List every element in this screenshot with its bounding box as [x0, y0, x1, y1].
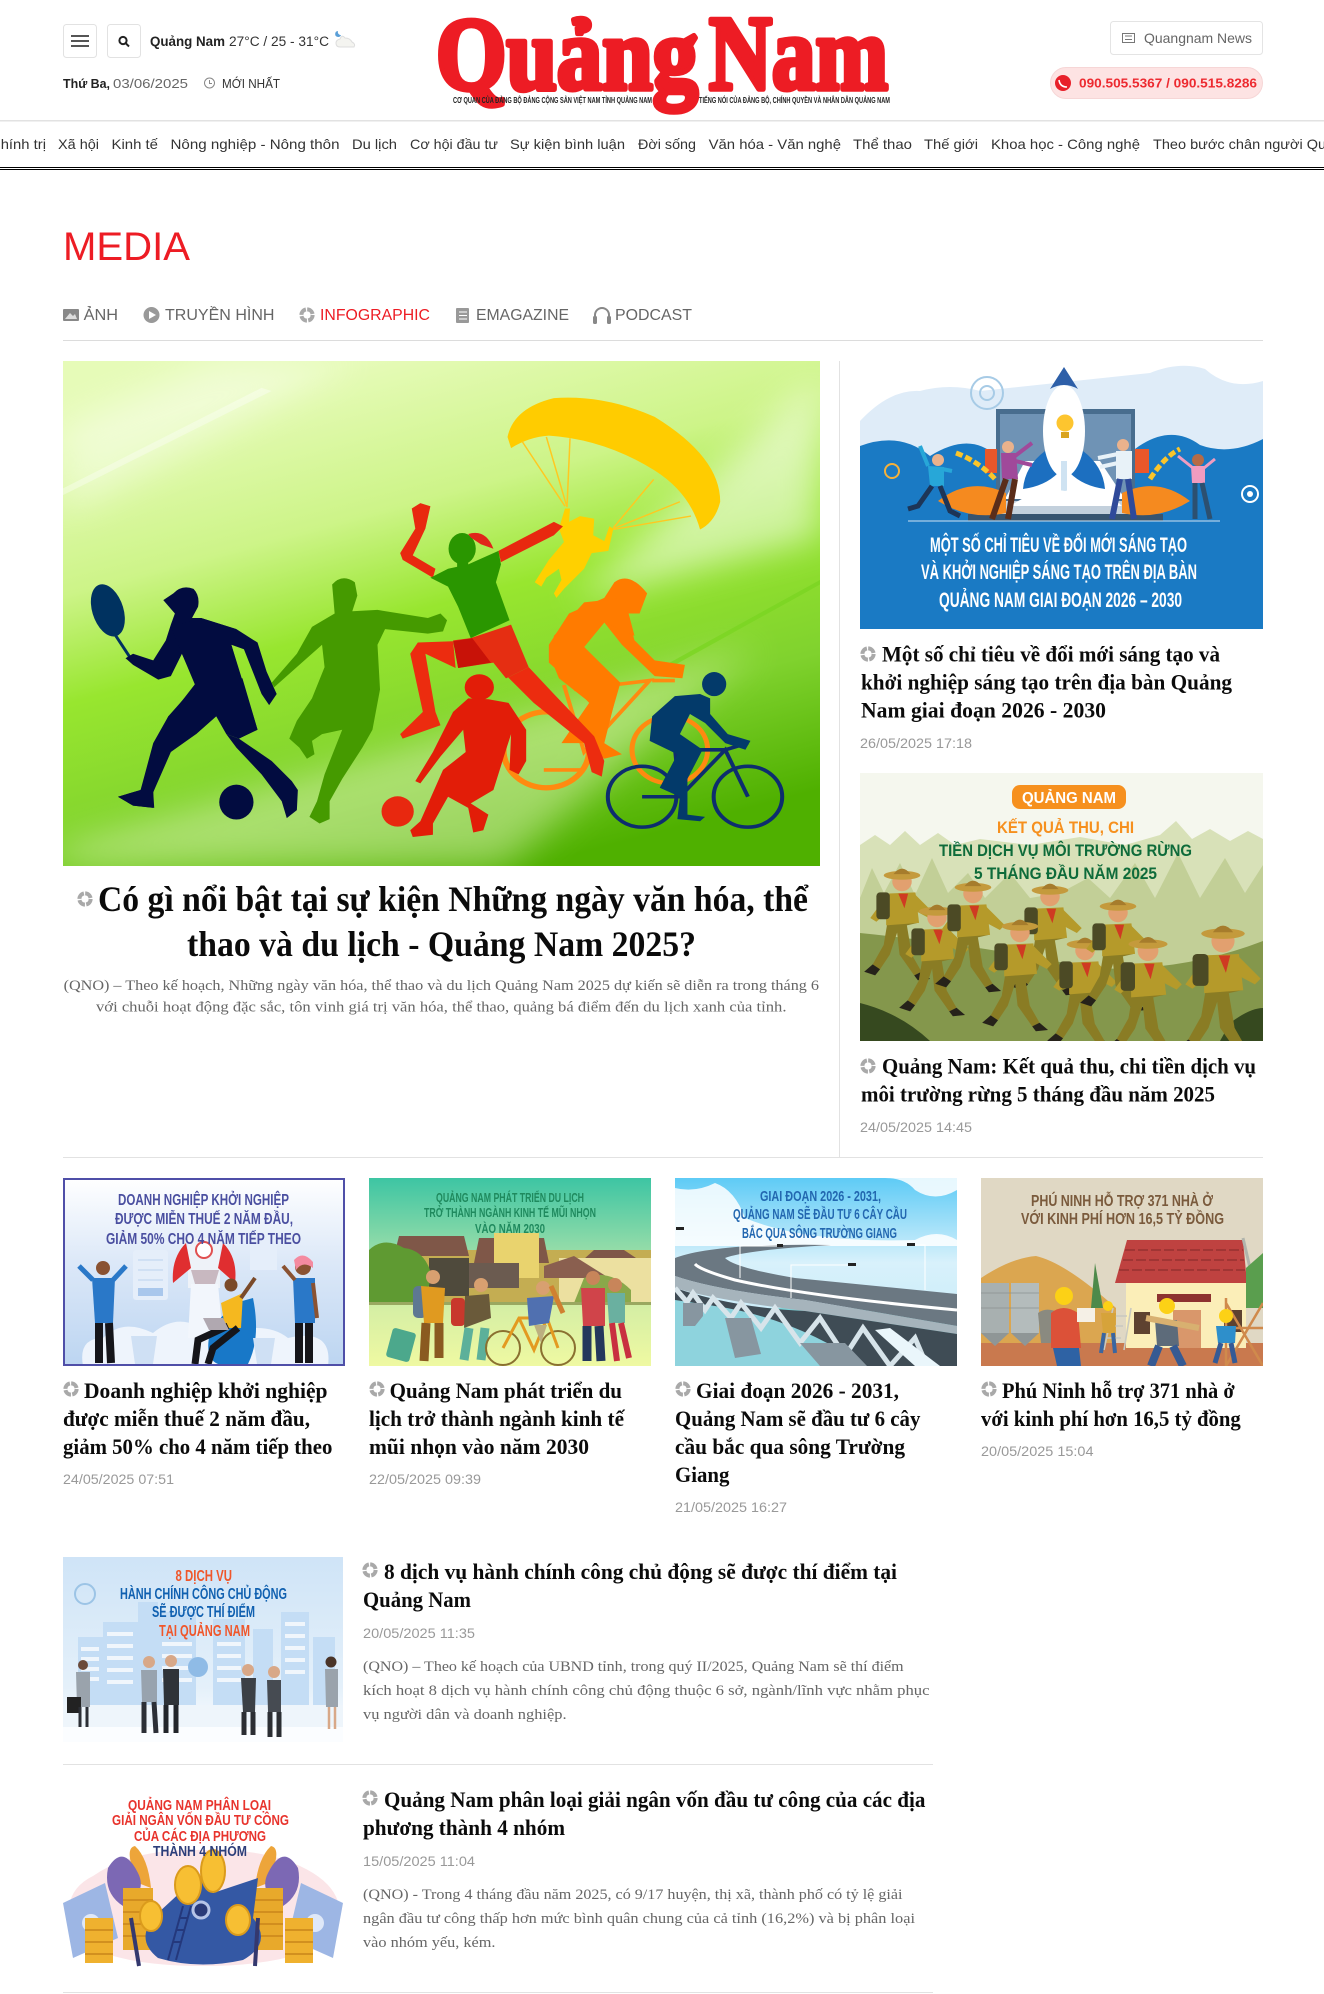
workers	[1051, 1308, 1081, 1348]
green footballer	[272, 578, 447, 824]
illustration: disbursement groups: THÀNH 4 NHÓM	[153, 1842, 247, 1860]
lead summary: (QNO) – Theo kế hoạch, Những ngày văn hóa, thể thao và du lịch Quảng Nam 2025 dự kiến sẽ diễn ra trong tháng 6	[64, 978, 820, 994]
navigation bar: Xã hội	[58, 136, 99, 152]
list date 1: 20/05/2025 11:35	[363, 1625, 475, 1641]
card 2	[369, 1178, 651, 1487]
list summary 1: kích hoạt 8 dịch vụ hành chính công chủ động thuộc 6 sở, ngành/lĩnh vực nhằm phục	[363, 1683, 930, 1699]
list summary 2: vào nhóm yếu, kém.	[363, 1935, 496, 1951]
card title 3: Giang	[675, 1462, 730, 1487]
search button	[108, 24, 140, 58]
card date 2: 22/05/2025 09:39	[369, 1471, 481, 1487]
tourists	[386, 1327, 416, 1363]
illustration: Hoi An tourism	[369, 1178, 651, 1366]
card title 2: Quảng Nam phát triển du	[390, 1378, 622, 1403]
logo: CƠ QUAN CỦA ĐẢNG BỘ ĐẢNG CỘNG SẢN VIỆT NAM TỈNH QUẢNG NAM	[453, 96, 652, 105]
lead title: Có gì nổi bật tại sự kiện Những ngày văn hóa, thể	[98, 879, 809, 919]
card 3	[675, 1178, 957, 1515]
navigation bar: Kinh tế	[112, 136, 158, 152]
people	[932, 454, 944, 466]
date and latest	[63, 76, 280, 91]
illustration: bridge: GIAI ĐOẠN 2026 - 2031,	[760, 1189, 881, 1205]
phone pill: 090.505.5367 / 090.515.8286	[1079, 76, 1257, 90]
card title 3: cầu bắc qua sông Trường	[675, 1434, 906, 1459]
illustration: forest scouts	[860, 773, 1263, 1041]
category tabs: EMAGAZINE	[476, 307, 569, 324]
illustration: Hoi An tourism: VÀO NĂM 2030	[475, 1221, 545, 1236]
card title 2: mũi nhọn vào năm 2030	[369, 1434, 589, 1459]
illustration: forest scouts: QUẢNG NAM	[1022, 788, 1116, 807]
illustration: startup tax exemption: DOANH NGHIỆP KHỞI NGHIỆP	[118, 1191, 289, 1209]
category tabs: TRUYỀN HÌNH	[165, 305, 274, 324]
menu button	[64, 24, 96, 58]
illustration: bridge	[675, 1178, 957, 1366]
illustration: public services	[63, 1557, 343, 1737]
phone pill	[1050, 68, 1262, 98]
section heading: MEDIA: MEDIA	[63, 225, 190, 269]
card title 1	[63, 1378, 332, 1459]
navigation bar: Khoa học - Công nghệ	[991, 136, 1140, 152]
list summary 1	[363, 1659, 930, 1723]
paraglider	[508, 398, 720, 529]
navigation bar: Thế giới	[924, 136, 978, 152]
illustration: public services: SẼ ĐƯỢC THÍ ĐIỂM	[152, 1603, 255, 1621]
navy cyclist	[608, 743, 782, 827]
Quangnam News button	[1110, 22, 1262, 54]
card title 4: với kinh phí hơn 16,5 tỷ đồng	[981, 1406, 1241, 1431]
list date 2: 15/05/2025 11:04	[363, 1853, 475, 1869]
logo: TIẾNG NÓI CỦA ĐẢNG BỘ, CHÍNH QUYỀN VÀ NHÂN DÂN QUẢNG NAM	[699, 95, 890, 105]
navigation bar: Đời sống	[638, 136, 696, 152]
side title 2: Quảng Nam: Kết quả thu, chi tiền dịch vụ	[882, 1054, 1256, 1078]
illustration: forest scouts: 5 THÁNG ĐẦU NĂM 2025	[974, 864, 1157, 883]
side date 2: 24/05/2025 14:45	[860, 1119, 972, 1135]
illustration: house construction: PHÚ NINH HỖ TRỢ 371 NHÀ Ở	[1031, 1191, 1213, 1210]
card title 4: Phú Ninh hỗ trợ 371 nhà ở	[1002, 1378, 1235, 1403]
card date 1: 24/05/2025 07:51	[63, 1471, 174, 1487]
jumping woman	[400, 503, 435, 578]
Quangnam News button: Quangnam News	[1144, 30, 1252, 46]
illustration: Hoi An tourism: QUẢNG NAM PHÁT TRIỂN DU LỊCH	[436, 1190, 584, 1205]
lead title	[79, 879, 809, 964]
navigation bar: Sự kiện bình luận	[510, 136, 625, 152]
lead title: thao và du lịch - Quảng Nam 2025?	[187, 924, 696, 964]
list title 2: phương thành 4 nhóm	[363, 1815, 565, 1840]
side title 1: Một số chỉ tiêu về đổi mới sáng tạo và	[882, 642, 1220, 666]
card date 3: 21/05/2025 16:27	[675, 1499, 787, 1515]
list summary 1: vụ người dân và doanh nghiệp.	[363, 1707, 567, 1723]
navigation bar: Thể thao	[853, 136, 912, 152]
list item 2	[63, 1787, 925, 1970]
tennis player	[85, 581, 131, 640]
date and latest: 03/06/2025	[113, 76, 188, 91]
orange cyclist	[503, 681, 708, 788]
illustration: forest scouts: KẾT QUẢ THU, CHI	[997, 818, 1134, 837]
weather: 27°C / 25 - 31°C	[229, 34, 329, 49]
list summary 2	[363, 1887, 915, 1951]
card title 3: Quảng Nam sẽ đầu tư 6 cây	[675, 1406, 921, 1431]
list item 1	[63, 1557, 930, 1742]
logo	[436, 0, 890, 112]
people in suits	[78, 1660, 88, 1670]
illustration: forest scouts: TIỀN DỊCH VỤ MÔI TRƯỜNG RỪNG	[939, 841, 1192, 860]
side article 1	[860, 361, 1263, 751]
card date 4: 20/05/2025 15:04	[981, 1443, 1094, 1459]
list title 1	[363, 1559, 897, 1612]
list title 1: Quảng Nam	[363, 1587, 471, 1612]
card title 4	[981, 1378, 1241, 1431]
card 4	[981, 1178, 1263, 1459]
navigation bar	[0, 120, 1324, 170]
card title 3	[675, 1378, 921, 1487]
side title 1: Nam giai đoạn 2026 - 2030	[861, 698, 1106, 722]
category tabs: ẢNH	[84, 305, 118, 324]
weather: Quảng Nam	[150, 34, 225, 49]
side title 2	[861, 1054, 1256, 1106]
card 1	[63, 1178, 345, 1487]
card title 2: lịch trở thành ngành kinh tế	[369, 1406, 626, 1431]
header	[63, 0, 1262, 112]
category tabs: INFOGRAPHIC	[320, 307, 430, 324]
deck	[675, 1245, 957, 1326]
illustration: startup tax exemption	[63, 1178, 345, 1366]
card title 1: được miễn thuế 2 năm đầu,	[63, 1406, 310, 1431]
navigation bar: Cơ hội đầu tư	[410, 136, 498, 152]
side title 1	[861, 642, 1233, 722]
card title 1: Doanh nghiệp khởi nghiệp	[84, 1378, 328, 1403]
illustration: public services: 8 DỊCH VỤ	[176, 1568, 232, 1585]
list title 2: Quảng Nam phân loại giải ngân vốn đầu tư công của các địa	[384, 1787, 925, 1812]
side date 1: 26/05/2025 17:18	[860, 735, 972, 751]
illustration: disbursement groups: QUẢNG NAM PHÂN LOẠI	[128, 1796, 271, 1814]
navigation bar: Văn hóa - Văn nghệ	[709, 136, 841, 152]
date and latest: MỚI NHẤT	[222, 76, 280, 91]
category tabs: PODCAST	[615, 307, 692, 324]
side title 2: môi trường rừng 5 tháng đầu năm 2025	[861, 1082, 1215, 1106]
illustration: startup tax exemption: ĐƯỢC MIỄN THUẾ 2 NĂM ĐẦU,	[115, 1211, 293, 1228]
card title 2	[369, 1378, 626, 1459]
illustration: disbursement groups: GIẢI NGÂN VỐN ĐẦU TƯ CÔNG	[112, 1811, 289, 1829]
list title 2	[363, 1787, 925, 1840]
navigation bar: Du lịch	[352, 136, 397, 152]
navigation bar: Nông nghiệp - Nông thôn	[170, 136, 340, 152]
lead summary	[64, 978, 820, 1016]
weather	[150, 31, 355, 49]
list summary 1: (QNO) – Theo kế hoạch của UBND tỉnh, trong quý II/2025, Quảng Nam sẽ thí điểm	[363, 1659, 904, 1675]
date and latest: Thứ Ba,	[63, 76, 110, 91]
card title 3: Giai đoạn 2026 - 2031,	[696, 1378, 899, 1403]
illustration: startup rocket	[860, 366, 1263, 629]
hero illustration: sports silhouettes	[63, 361, 820, 866]
lead summary: với chuỗi hoạt động đặc sắc, tôn vinh giá trị văn hóa, thể thao, quảng bá điểm đến du lịch xanh của tỉnh.	[96, 1000, 786, 1016]
illustration: disbursement groups: CỦA CÁC ĐỊA PHƯƠNG	[134, 1827, 266, 1845]
category tabs	[63, 305, 1263, 341]
list summary 2: (QNO) - Trong 4 tháng đầu năm 2025, có 9/17 huyện, thị xã, thành phố có tỷ lệ giải	[363, 1887, 902, 1903]
card title 1: giảm 50% cho 4 năm tiếp theo	[63, 1434, 332, 1459]
list title 1: 8 dịch vụ hành chính công chủ động sẽ được thí điểm tại	[384, 1559, 897, 1584]
illustration: disbursement groups	[63, 1796, 343, 1966]
list summary 2: ngân đầu tư công thấp hơn mức bình quân chung của cả tỉnh (16,2%) và bị phân loại	[363, 1911, 915, 1927]
logo: Quảng	[436, 0, 698, 112]
side title 1: khởi nghiệp sáng tạo trên địa bàn Quảng	[861, 670, 1233, 694]
illustration: public services: TẠI QUẢNG NAM	[159, 1623, 250, 1640]
red footballer	[465, 674, 494, 700]
lead article panel	[63, 361, 820, 1016]
illustration: house construction	[981, 1178, 1263, 1366]
side article 2	[860, 773, 1263, 1135]
